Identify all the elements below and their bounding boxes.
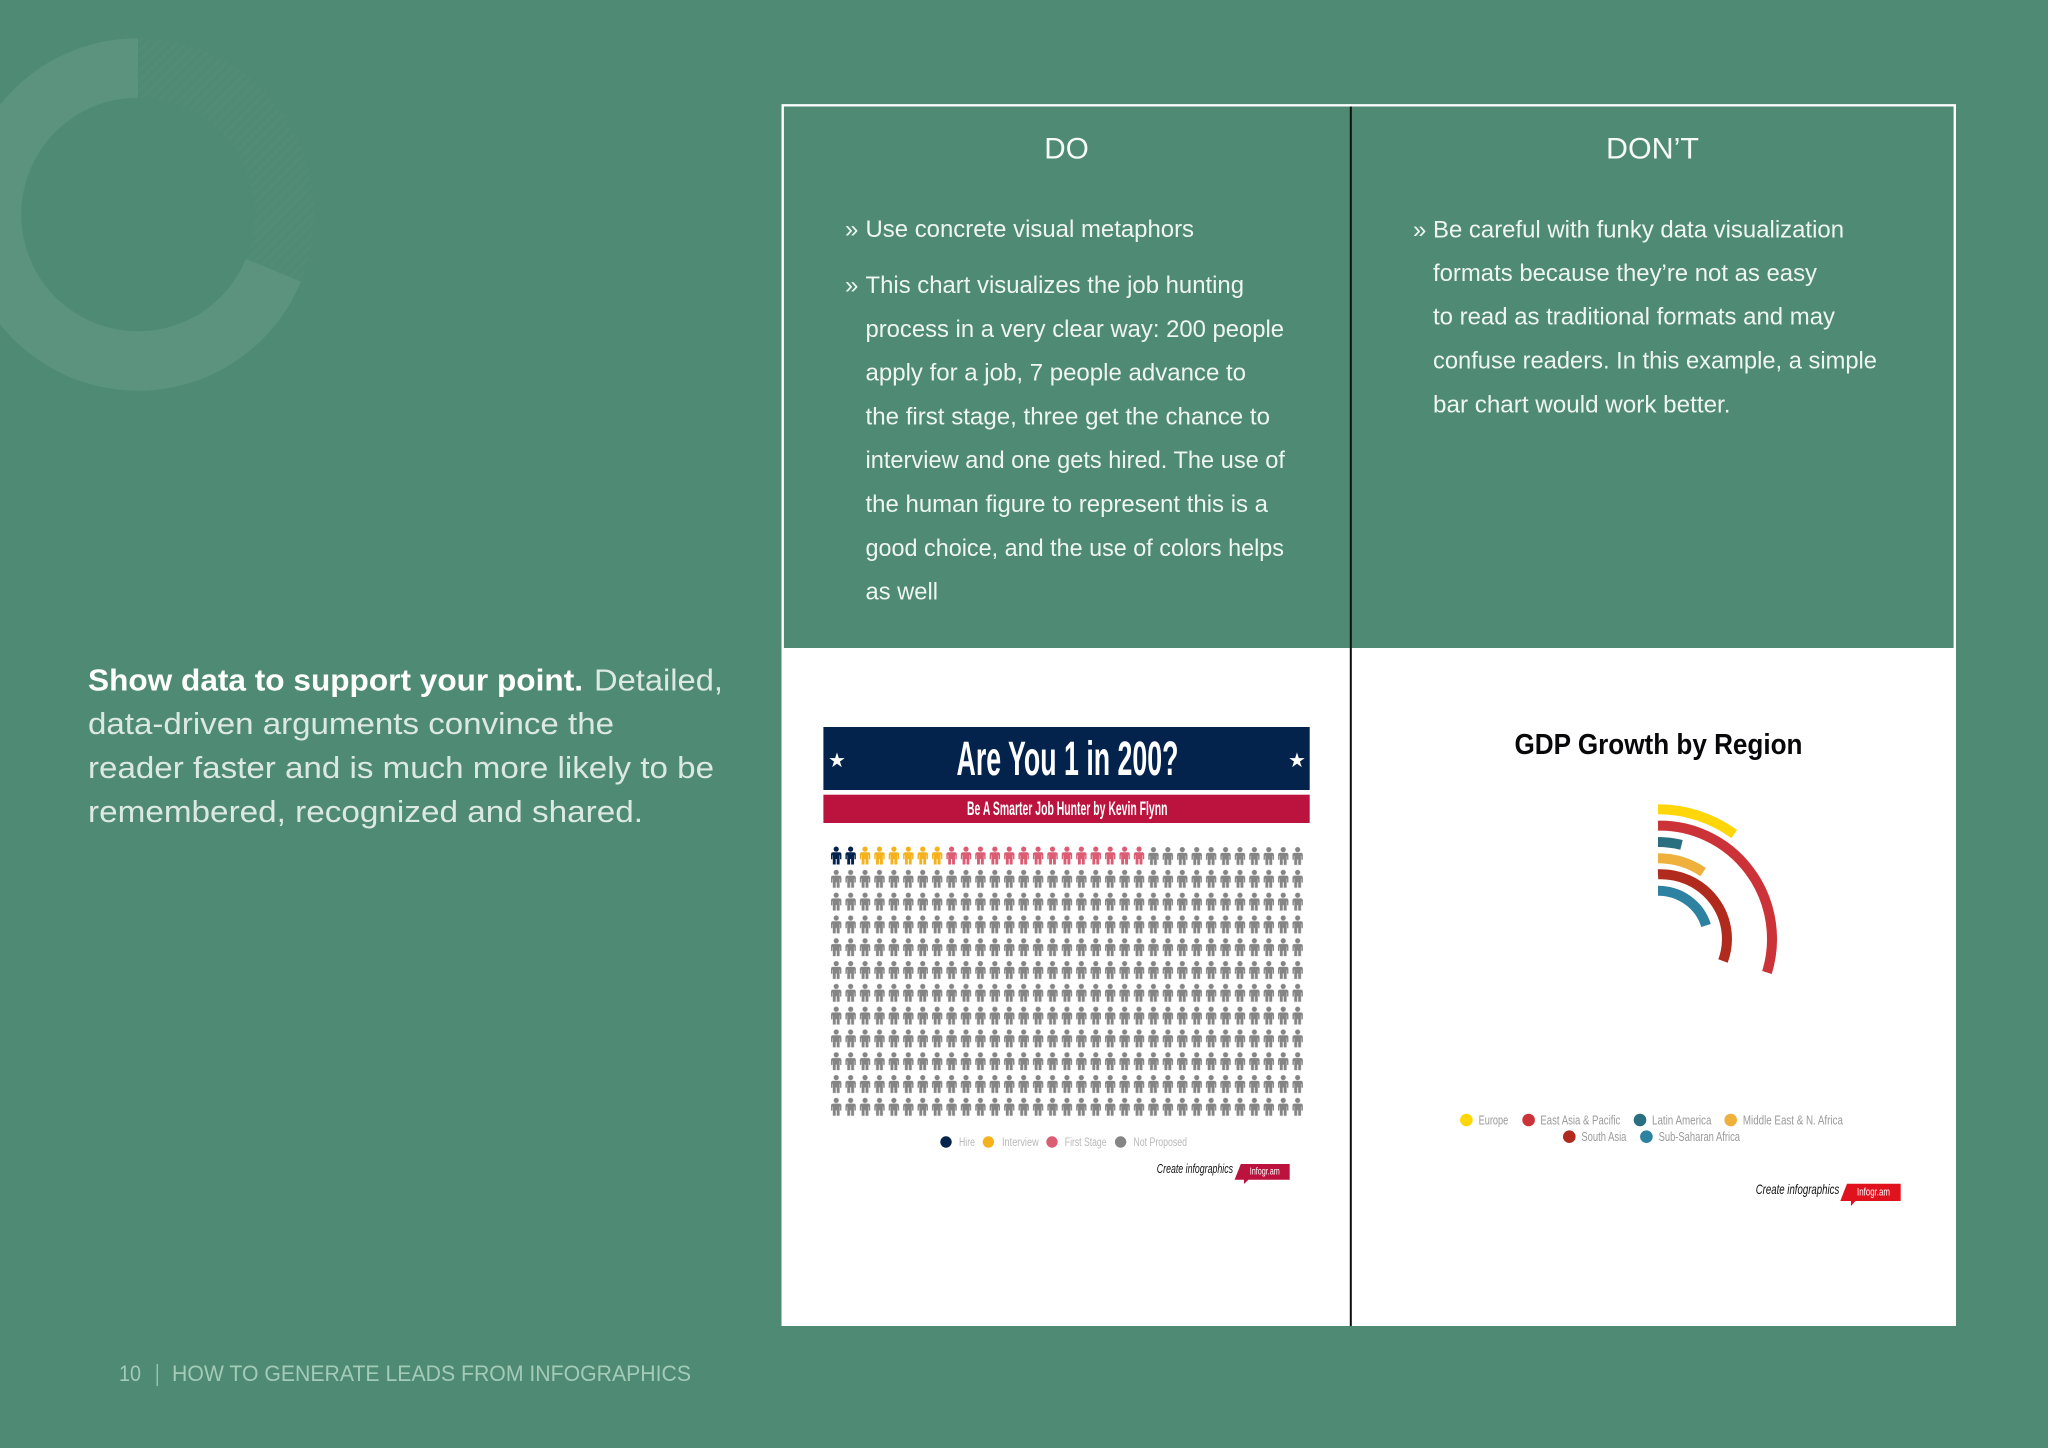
credit badge: Infogr.am: [1250, 1167, 1280, 1178]
legend: [1460, 1113, 1843, 1144]
heading: DO: DO: [1044, 132, 1089, 165]
table white lower area: [782, 648, 1956, 1326]
DO bullet list: the first stage, three get the chance to: [866, 403, 1270, 430]
DO bullet list: »: [845, 272, 858, 299]
intro text block: reader faster and is much more likely to be: [88, 750, 714, 785]
DO bullet list: the human figure to represent this is a: [866, 491, 1269, 518]
intro text block: data-driven arguments convince the: [88, 706, 614, 741]
footer page number and title: 10: [119, 1361, 141, 1386]
credit badge: Infogr.am: [1857, 1187, 1890, 1199]
DO bullet list: process in a very clear way: 200 people: [866, 316, 1284, 343]
column divider: [1350, 106, 1352, 1326]
credit badge: [1157, 1161, 1290, 1184]
legend: East Asia & Pacific: [1540, 1113, 1620, 1127]
legend: [940, 1136, 1187, 1149]
DO bullet list: This chart visualizes the job hunting: [866, 272, 1244, 299]
DON'T bullet list: confuse readers. In this example, a simple: [1433, 347, 1877, 374]
DON'T bullet list: to read as traditional formats and may: [1433, 304, 1835, 331]
intro text block: [88, 662, 723, 829]
legend: Middle East & N. Africa: [1743, 1113, 1843, 1127]
DO bullet list: [845, 216, 1285, 606]
DON'T bullet list: Be careful with funky data visualization: [1433, 216, 1844, 243]
comparison table: [782, 105, 1956, 1326]
banner: title: Are You 1 in 200?: [956, 733, 1178, 786]
decorative donut chart: [0, 68, 284, 361]
banner: title: ★: [828, 750, 846, 772]
heading: DON'T: DON’T: [1606, 132, 1699, 165]
legend: Not Proposed: [1133, 1137, 1187, 1149]
pictogram of people: [829, 846, 1305, 1120]
DO bullet list: as well: [866, 579, 938, 606]
legend: First Stage: [1065, 1137, 1106, 1149]
banner: subtitle: [823, 795, 1310, 823]
credit badge: Create infographics: [1157, 1161, 1233, 1176]
table frame: [783, 105, 1955, 648]
DON'T bullet list: »: [1413, 216, 1426, 243]
legend: Interview: [1002, 1137, 1039, 1149]
banner: title: ★: [1288, 750, 1306, 772]
DO bullet list: good choice, and the use of colors helps: [866, 535, 1284, 562]
intro text block: remembered, recognized and shared.: [88, 794, 643, 829]
DON'T bullet list: [1413, 216, 1877, 418]
legend: Sub-Saharan Africa: [1659, 1130, 1740, 1144]
footer page number and title: HOW TO GENERATE LEADS FROM INFOGRAPHICS: [172, 1361, 691, 1386]
radial bars: [1658, 809, 1772, 972]
chart: Are You 1 in 200: [823, 727, 1310, 1184]
legend: Latin America: [1652, 1113, 1711, 1127]
legend: Hire: [959, 1137, 975, 1149]
DO bullet list: »: [845, 216, 858, 243]
DO bullet list: apply for a job, 7 people advance to: [866, 360, 1246, 387]
banner: title: [823, 727, 1310, 790]
credit badge: [1756, 1181, 1901, 1206]
credit badge: Create infographics: [1756, 1181, 1839, 1197]
chart title: GDP Growth by Region: [1514, 729, 1802, 761]
DON'T bullet list: formats because they’re not as easy: [1433, 260, 1817, 287]
chart: GDP Growth by Region: [1460, 729, 1901, 1206]
legend: South Asia: [1581, 1130, 1626, 1144]
intro text block: Detailed,: [594, 662, 723, 697]
banner: subtitle: Be A Smarter Job Hunter by Kevin Flynn: [967, 799, 1168, 820]
DON'T bullet list: bar chart would work better.: [1433, 391, 1730, 418]
intro text block: Show data to support your point.: [88, 662, 583, 697]
legend: Europe: [1479, 1113, 1508, 1127]
DO bullet list: interview and one gets hired. The use of: [866, 447, 1285, 474]
DO bullet list: Use concrete visual metaphors: [866, 216, 1194, 243]
